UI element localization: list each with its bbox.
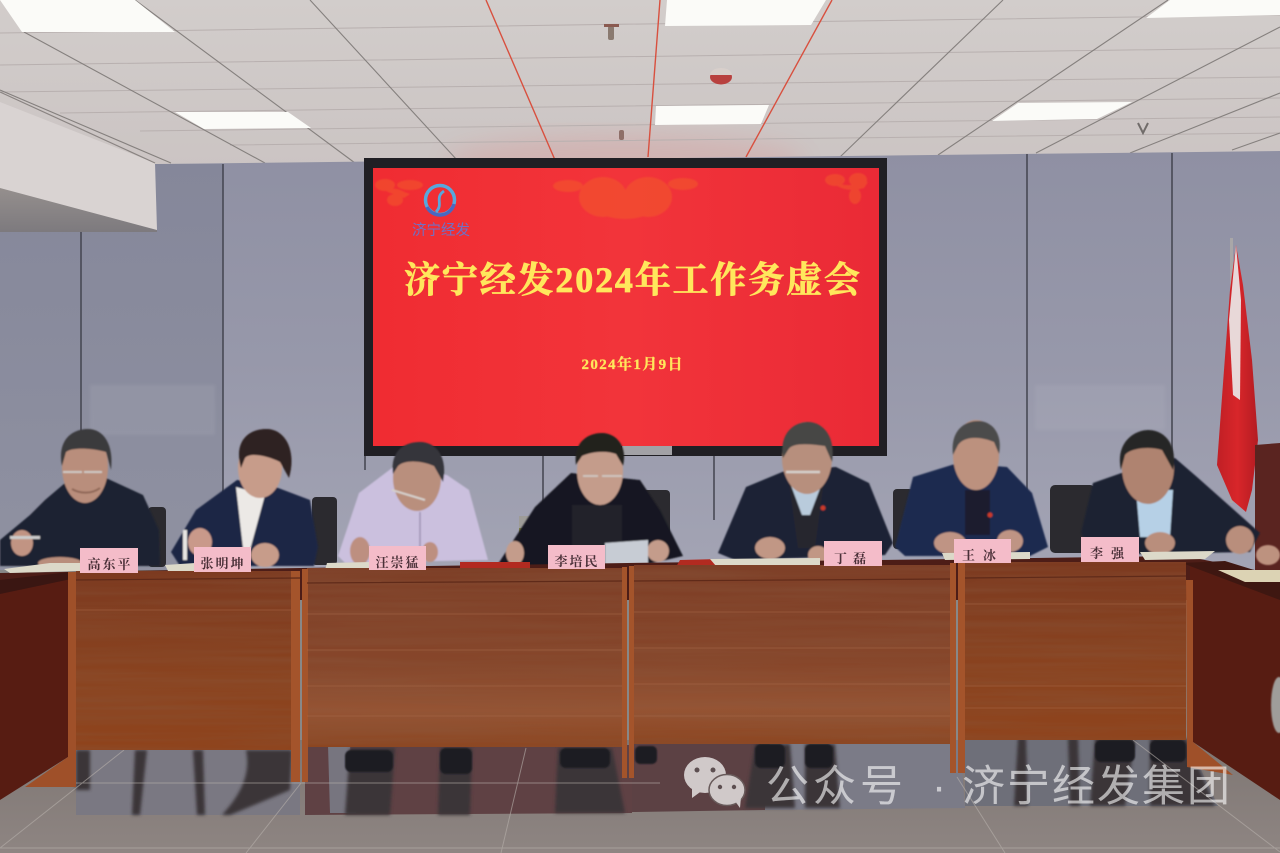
table left wing <box>0 572 76 800</box>
name card: 李强 <box>1081 537 1139 562</box>
table right wing <box>1182 561 1280 800</box>
screen frame <box>364 158 887 456</box>
date: 2024年1月9日 <box>582 355 682 373</box>
green tea bottle <box>519 516 538 569</box>
name card: 张明坤 <box>194 547 251 572</box>
soffit left <box>0 92 157 232</box>
name card: 高东平 <box>80 548 138 573</box>
ceiling detectors <box>604 24 1148 140</box>
person 6 <box>895 420 1048 556</box>
name card: 高东平: 高东平 <box>87 557 133 572</box>
name card: 丁磊 <box>824 541 882 566</box>
chairs <box>148 485 1095 567</box>
watermark: account name: 济宁经发集团 <box>962 763 1232 811</box>
watermark: account name: 公众号 <box>766 763 907 811</box>
screen floral decoration <box>375 173 868 219</box>
wall panels <box>0 151 1280 570</box>
name card: 李强: 李强 <box>1090 546 1132 561</box>
watermark: account name: · <box>932 763 946 811</box>
person at lower right edge <box>1271 677 1280 733</box>
notebooks on table <box>4 551 1215 573</box>
ceiling lights <box>0 0 1280 129</box>
table top <box>0 551 1280 600</box>
logo: 济宁经发 <box>412 222 470 239</box>
name card: 张明坤: 张明坤 <box>200 556 246 571</box>
name card: 王冰 <box>954 539 1011 563</box>
person 1 <box>0 429 160 569</box>
watermark: WeChat icon <box>684 757 745 808</box>
title: 济宁经发2024年工作务虚会 <box>404 260 860 300</box>
ceiling <box>0 0 1280 190</box>
name card: 汪崇猛: 汪崇猛 <box>375 555 421 570</box>
person 4 <box>498 433 683 566</box>
national flag <box>1217 238 1258 512</box>
name card: 丁磊: 丁磊 <box>834 551 872 566</box>
name card: 李培民: 李培民 <box>554 554 600 569</box>
watermark: account name <box>766 763 1232 811</box>
screen red background <box>373 168 879 446</box>
floor <box>0 738 1280 853</box>
name card: 李培民 <box>548 545 605 569</box>
person 2 <box>171 429 318 567</box>
logo <box>412 186 470 239</box>
cabinet <box>1255 443 1280 570</box>
table front panels <box>76 562 1186 782</box>
person 5 <box>718 422 893 564</box>
table posts <box>291 562 965 782</box>
person 3 <box>338 442 488 565</box>
name card: 王冰: 王冰 <box>962 548 1004 563</box>
name card: 汪崇猛 <box>369 546 426 570</box>
person 7 <box>1081 430 1280 565</box>
